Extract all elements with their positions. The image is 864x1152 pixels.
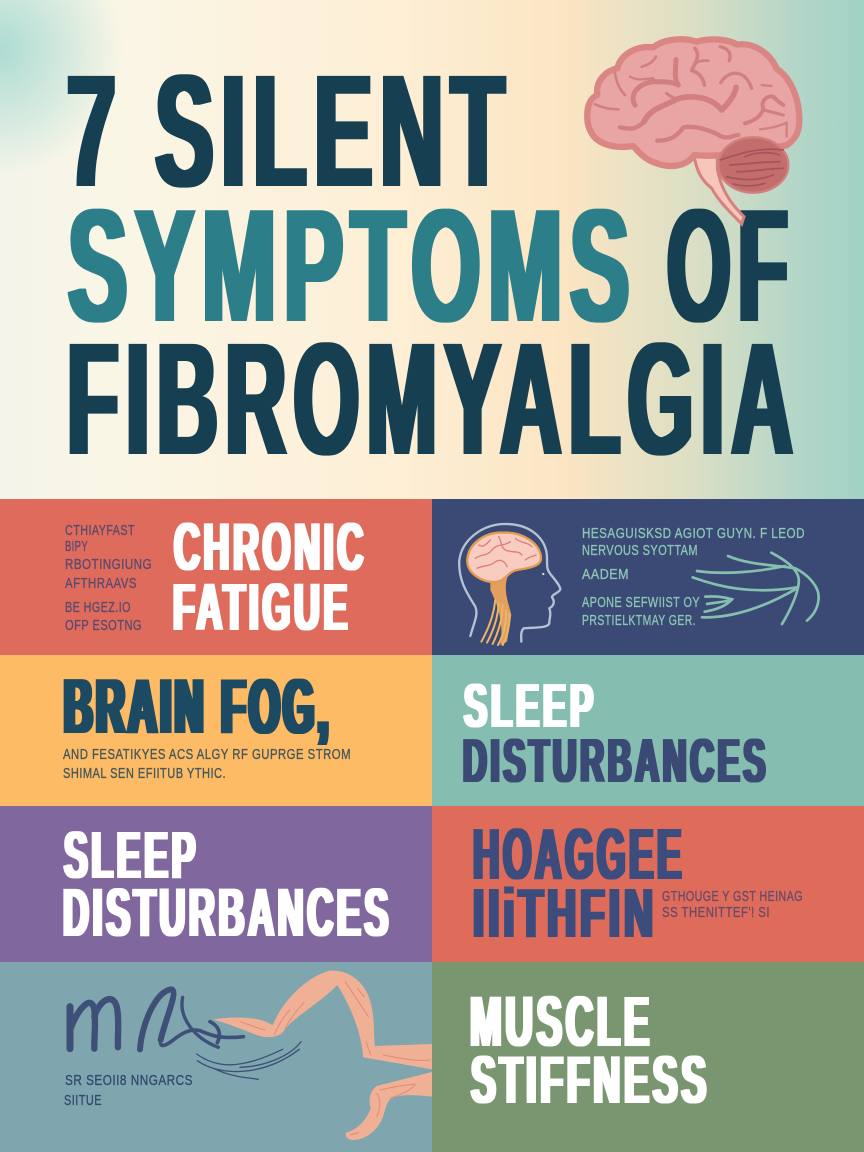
heading: MUSCLE	[470, 983, 653, 1062]
panel: sleep disturbances left	[0, 806, 432, 962]
small text block: RBOTINGIUNG	[65, 557, 152, 573]
small text block: OFP ESOTNG	[65, 618, 142, 634]
heading	[63, 818, 392, 951]
heading: SLEEP	[64, 818, 199, 893]
title	[67, 41, 800, 488]
heading: BRAIN FOG,	[64, 662, 332, 750]
small text block: HESAGUISKSD AGIOT GUYN. F LEOD	[582, 526, 805, 542]
heading: FATIGUE	[173, 570, 351, 645]
heading: SLEEP	[464, 672, 597, 741]
small text block: BE HGEZ.IO	[65, 600, 131, 616]
heading	[470, 983, 710, 1118]
small text block: AADEM	[582, 567, 629, 583]
small text block	[64, 1073, 193, 1109]
small text block: SR SEOII8 NNGARCS	[65, 1073, 193, 1089]
small text block	[662, 889, 803, 921]
icon: head with brain	[459, 524, 560, 645]
heading	[463, 672, 769, 796]
icon: nerve branches	[693, 553, 819, 624]
small text block: AFTHRAAVS	[65, 576, 137, 592]
small text block: PRSTIELKTMAY GER.	[582, 613, 696, 629]
panel: hoaggee	[432, 806, 864, 962]
panel: muscle stiffness	[432, 962, 864, 1152]
small text block: SS THENITTEF'! SI	[662, 905, 770, 921]
small text block: NERVOUS SYOTTAM	[582, 543, 698, 559]
heading: IIiTHFIN	[473, 874, 657, 952]
small text block: AND FESATIKYES ACS ALGY RF GUPRGE STROM	[63, 747, 351, 763]
small text block: BIPY	[65, 539, 88, 555]
heading: DISTURBANCES	[63, 874, 392, 951]
small text block: SHIMAL SEN EFIITUB YTHIC.	[63, 766, 226, 782]
icon: brain	[587, 39, 799, 224]
heading	[173, 509, 367, 645]
panel: brain fog	[0, 655, 432, 806]
panel: sleep disturbances right	[432, 655, 864, 806]
small text block	[65, 523, 152, 634]
icon: scribble and nerve lines	[70, 989, 301, 1079]
panel: leg illustration	[0, 962, 432, 1152]
small text block: CTHIAYFAST	[65, 523, 135, 539]
icon: leg	[213, 971, 432, 1140]
header background	[0, 0, 864, 499]
small text block: APONE SEFWIIST OY	[582, 595, 700, 611]
panel: nervous system	[432, 499, 864, 655]
panel: chronic fatigue	[0, 499, 432, 655]
small text block	[63, 747, 351, 782]
small text block: GTHOUGE Y GST HEINAG	[662, 889, 803, 905]
heading: CHRONIC	[174, 509, 367, 585]
heading	[473, 815, 685, 952]
title: 7 SILENT	[67, 41, 512, 220]
small text block: SIITUE	[64, 1093, 102, 1109]
small text block	[582, 526, 805, 629]
